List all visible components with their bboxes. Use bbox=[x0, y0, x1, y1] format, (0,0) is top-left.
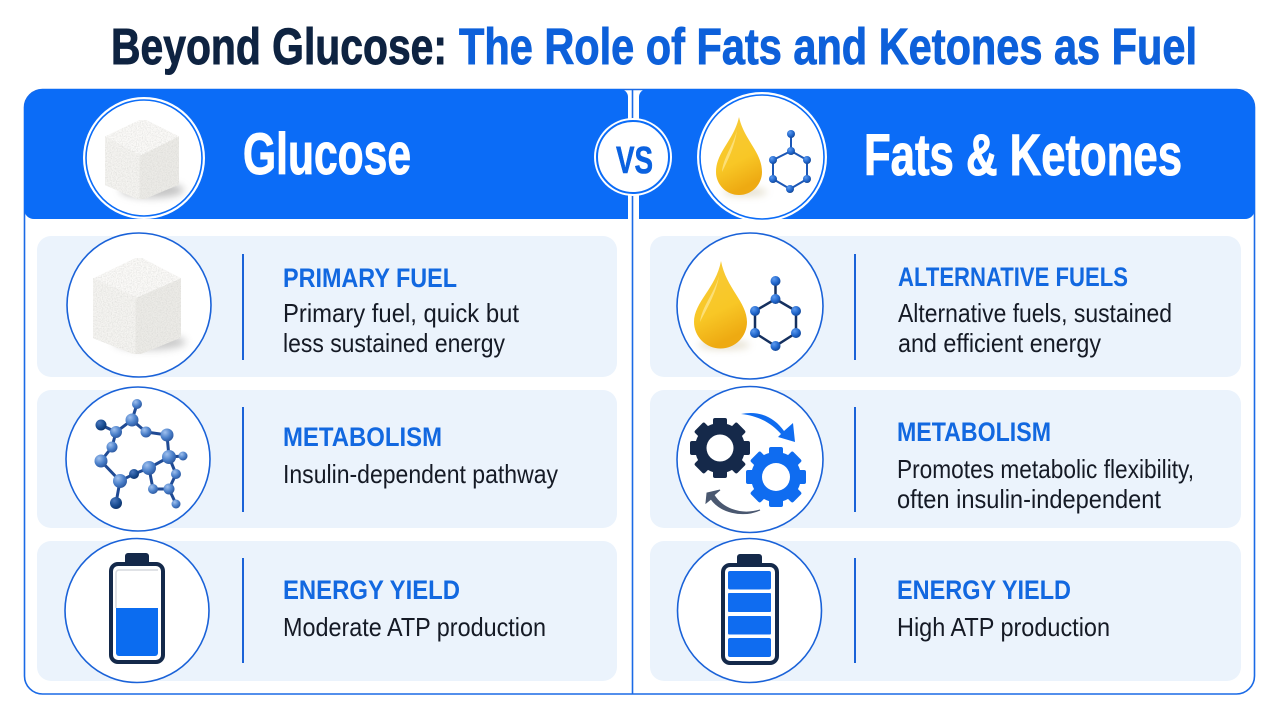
text: metabolism: METABOLISM bbox=[897, 417, 1051, 447]
panel header: glucose bbox=[24, 89, 628, 219]
title: Beyond Glucose: bbox=[111, 18, 447, 75]
icon: sugar cube bbox=[67, 233, 211, 377]
text: metabolism: Promotes metabolic flexibility, bbox=[897, 454, 1194, 484]
text: alternative fuels: and efficient energy bbox=[898, 328, 1101, 358]
vs badge bbox=[594, 118, 672, 196]
text: metabolism: METABOLISM bbox=[283, 422, 442, 452]
icon: glucose molecule bbox=[66, 387, 210, 531]
icon: full battery bbox=[678, 538, 822, 682]
text: metabolism bbox=[283, 422, 558, 489]
text: energy yield bbox=[283, 575, 546, 642]
panel: glucose metabolism bbox=[37, 387, 617, 531]
icon: oil drop and molecule in header bbox=[697, 92, 827, 222]
text: primary fuel: PRIMARY FUEL bbox=[283, 263, 457, 293]
icon: sugar cube in header bbox=[83, 97, 205, 219]
text: primary fuel: Primary fuel, quick but bbox=[283, 298, 520, 328]
vs badge: VS bbox=[616, 140, 653, 182]
heading: fats and ketones: Fats & Ketones bbox=[864, 123, 1182, 188]
text: alternative fuels: ALTERNATIVE FUELS bbox=[898, 262, 1128, 292]
panel: glucose energy yield bbox=[37, 538, 617, 682]
icon: half-full battery bbox=[65, 538, 209, 682]
text: primary fuel bbox=[283, 263, 520, 358]
title bbox=[111, 18, 1197, 75]
text: alternative fuels bbox=[898, 262, 1172, 358]
text: metabolism: often insulin-independent bbox=[897, 484, 1162, 514]
panel header: fats and ketones bbox=[639, 89, 1255, 222]
icon: gears with cycle arrows bbox=[677, 386, 823, 532]
text: energy yield: ENERGY YIELD bbox=[897, 575, 1071, 605]
text: energy yield: ENERGY YIELD bbox=[283, 575, 460, 605]
text: alternative fuels: Alternative fuels, sustained bbox=[898, 298, 1172, 328]
text: energy yield: Moderate ATP production bbox=[283, 612, 546, 642]
panel: alternative fuels bbox=[650, 233, 1241, 379]
text: energy yield bbox=[897, 575, 1110, 642]
icon: oil drop and molecule bbox=[677, 233, 823, 379]
text: primary fuel: less sustained energy bbox=[283, 328, 505, 358]
text: metabolism bbox=[897, 417, 1194, 514]
panel: fats metabolism bbox=[650, 386, 1241, 532]
text: energy yield: High ATP production bbox=[897, 612, 1110, 642]
text: metabolism: Insulin-dependent pathway bbox=[283, 459, 558, 489]
panel: fats energy yield bbox=[650, 538, 1241, 682]
panel: glucose primary fuel bbox=[37, 233, 617, 377]
heading: glucose: Glucose bbox=[243, 122, 411, 187]
